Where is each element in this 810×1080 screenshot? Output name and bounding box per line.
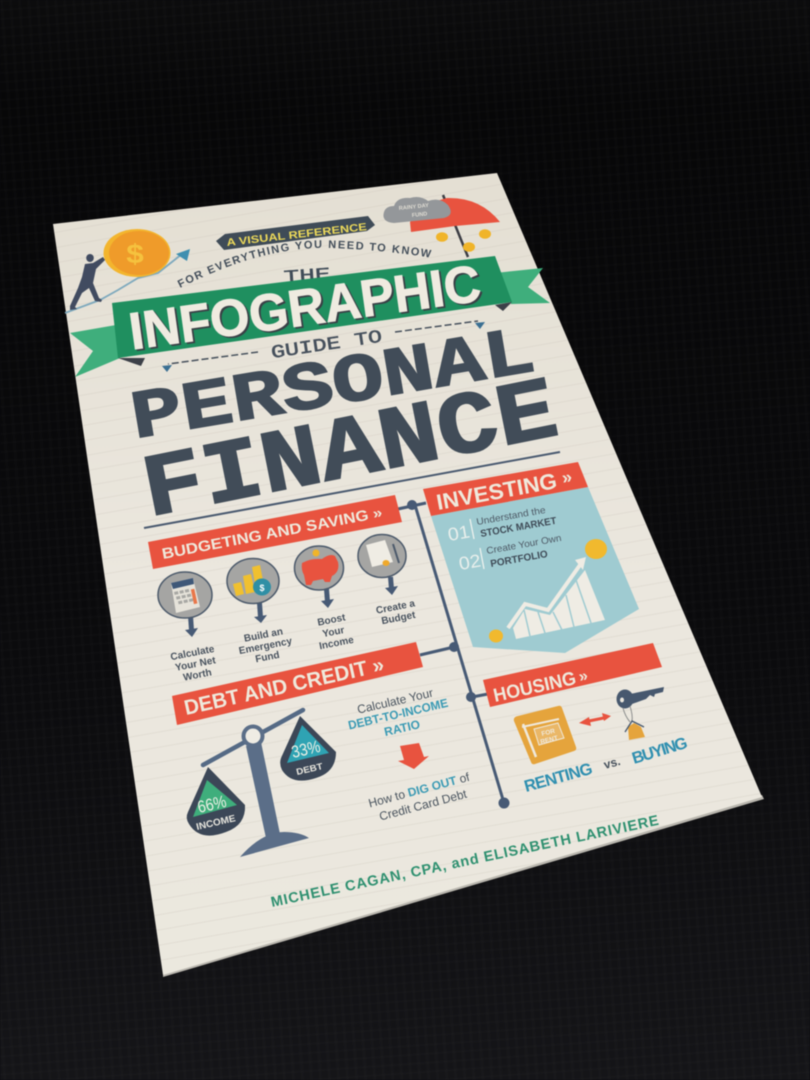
label: boost income xyxy=(317,612,355,652)
title: finance: FINANCE xyxy=(135,363,566,542)
icon: cloud: FUND xyxy=(412,211,428,219)
icon: calculator xyxy=(158,572,212,637)
icon: umbrella handle xyxy=(443,195,468,257)
icon: falling coins xyxy=(436,229,491,252)
icon: coin large xyxy=(585,539,607,559)
label: calculate net worth xyxy=(170,644,217,684)
debt-to-income text: Calculate Your xyxy=(356,686,434,717)
icon: rising arrow xyxy=(65,249,190,313)
debt-to-income text: RATIO xyxy=(383,717,421,739)
label: build emergency fund: Fund xyxy=(254,650,281,665)
label: boost income: Boost xyxy=(317,612,347,629)
step 02: PORTFOLIO xyxy=(490,549,549,570)
label: calculate net worth: Calculate xyxy=(170,644,216,663)
left pan: income xyxy=(187,767,245,836)
tagline arc text: FOR EVERYTHING YOU NEED TO KNOW xyxy=(176,240,432,288)
dig out text: Credit Card Debt xyxy=(378,787,469,824)
ribbon right tail xyxy=(495,268,550,304)
illustration: man pushing coin xyxy=(65,229,190,313)
section: debt and credit xyxy=(172,642,472,857)
dashed arrow left xyxy=(162,352,258,372)
icon: coins and money bag xyxy=(227,558,279,623)
debt-to-income text xyxy=(347,686,449,739)
ribbon left tail xyxy=(70,325,120,377)
label: build emergency fund: Emergency xyxy=(238,636,293,657)
step 01: STOCK MARKET xyxy=(480,516,557,540)
icon: dollar coin: $ xyxy=(126,239,144,269)
left pan: income: INCOME xyxy=(195,813,237,833)
book cover xyxy=(52,172,764,978)
icon: red down arrow xyxy=(398,743,429,769)
title ribbon xyxy=(70,255,550,377)
icon: piggy bank xyxy=(294,546,344,608)
step 02 xyxy=(457,533,562,574)
icon: coins and money bag: $ xyxy=(259,583,265,593)
label: create a budget xyxy=(375,598,417,627)
divider rule xyxy=(144,452,560,528)
subtitle: guide to: GUIDE TO xyxy=(270,328,384,364)
scale base xyxy=(240,832,309,857)
icon: for rent sign: FOR xyxy=(541,728,556,738)
investing panel xyxy=(431,487,639,653)
debt banner: DEBT AND CREDIT » xyxy=(182,653,386,720)
ribbon title word: INFOGRAPHIC xyxy=(126,255,484,361)
label: calculate net worth: Worth xyxy=(182,667,213,684)
right pan: debt: 33% xyxy=(290,737,322,762)
investing banner xyxy=(423,462,588,516)
left pan: income: 66% xyxy=(196,792,228,817)
label: create a budget: Create a xyxy=(375,598,416,617)
debt banner xyxy=(172,642,423,725)
balance scale xyxy=(187,710,336,857)
section: housing xyxy=(483,643,690,796)
title word: THE: THE xyxy=(283,266,331,288)
investing banner: INVESTING xyxy=(434,468,559,515)
illustration: rainy day umbrella xyxy=(383,195,500,257)
label: build emergency fund: Build an xyxy=(243,626,284,645)
step 01: Understand the xyxy=(476,505,546,528)
icon: umbrella canopy xyxy=(410,198,500,232)
step 01: 01 xyxy=(446,521,471,545)
scale pivot xyxy=(244,726,262,746)
icon: cloud xyxy=(383,197,451,223)
dashed arrow right xyxy=(395,321,485,332)
section: investing xyxy=(423,462,639,653)
label: renting: RENTING xyxy=(522,760,595,796)
icon: key with house fob xyxy=(616,687,664,740)
label: create a budget: Budget xyxy=(381,610,417,627)
section banner xyxy=(148,495,402,569)
label: vs.: vs. xyxy=(602,754,622,772)
label: calculate net worth: Your Net xyxy=(174,655,217,674)
right pan: debt xyxy=(280,716,336,781)
icon: cloud: RAINY DAY xyxy=(399,203,429,212)
dig out text: How to DIG OUT of xyxy=(367,770,472,810)
step 01 xyxy=(446,505,557,545)
tagline pill: A VISUAL REFERENCE xyxy=(226,221,367,249)
icon: for rent sign xyxy=(514,706,576,764)
housing banner xyxy=(483,643,662,707)
title ribbon: INFOGRAPHIC xyxy=(128,256,486,363)
right pan: debt: DEBT xyxy=(295,761,324,777)
icon: red double arrow xyxy=(579,713,611,726)
debt-to-income text: DEBT-TO-INCOME xyxy=(347,696,449,732)
section: budgeting and saving xyxy=(148,495,417,684)
icon: budget document xyxy=(358,534,406,595)
housing banner: HOUSING xyxy=(492,668,578,707)
housing banner: » xyxy=(577,667,590,686)
step 02: 02 xyxy=(457,550,482,574)
icon: man xyxy=(70,254,105,310)
icon: coin small xyxy=(489,630,503,642)
scale beam xyxy=(203,710,303,765)
scale pole xyxy=(246,742,280,838)
timeline xyxy=(398,500,510,808)
authors: MICHELE CAGAN, CPA, and ELISABETH LARIVIERE xyxy=(270,813,660,911)
title: personal: PERSONAL xyxy=(126,315,541,459)
icon: for rent sign: RENT xyxy=(540,735,559,746)
label: build emergency fund xyxy=(238,626,293,665)
investing banner: » xyxy=(560,466,574,488)
tagline pill xyxy=(216,216,375,250)
label: buying: BUYING xyxy=(630,734,690,768)
section banner: BUDGETING AND SAVING » xyxy=(161,504,384,563)
ribbon center xyxy=(112,256,512,358)
step 02: Create Your Own xyxy=(486,533,562,557)
rising bar chart xyxy=(508,557,605,639)
label: boost income: Income xyxy=(318,635,355,652)
label: boost income: Your xyxy=(322,625,345,640)
